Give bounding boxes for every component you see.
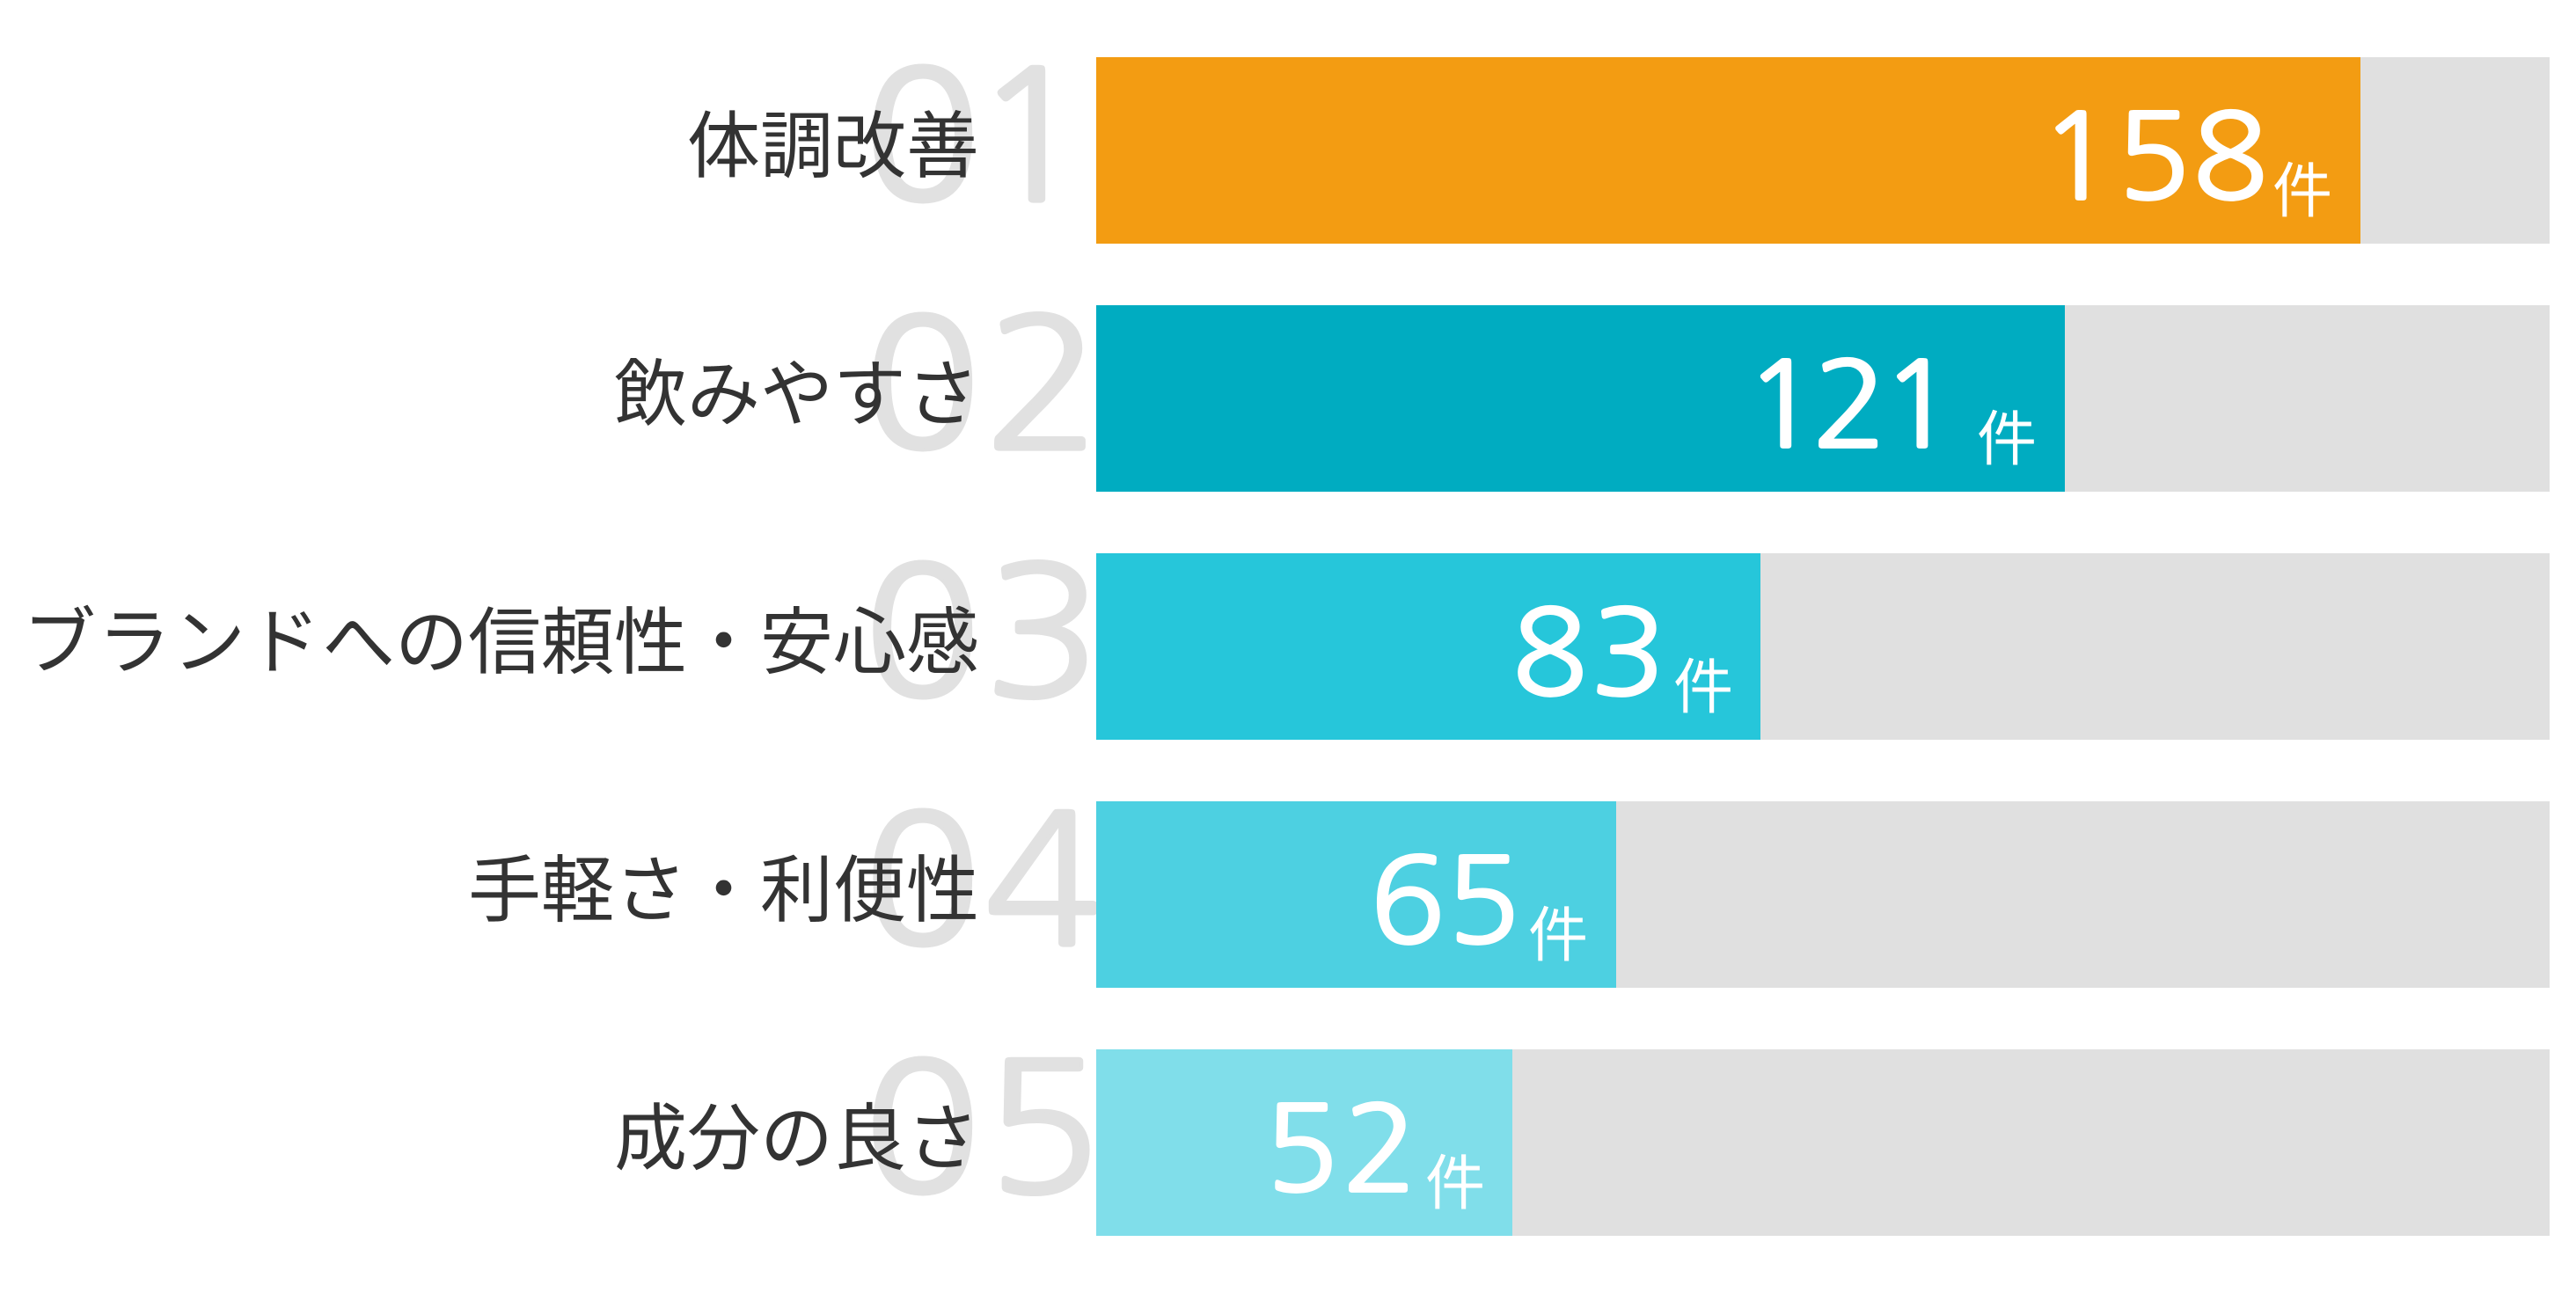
unit: 件 [1977,391,2037,478]
row 4: 手軽さ・利便性 [468,790,2550,988]
track [1096,1049,2550,1236]
row 1: 体調改善 [687,46,2550,244]
rank number 05: 05 [863,1038,1105,1219]
label: 成分の良さ [614,1079,979,1185]
value bar [1096,305,2065,492]
value: 52 [1264,1090,1421,1208]
row 3: ブランドへの信頼性・安心感 [23,542,2550,740]
unit: 件 [1673,639,1733,726]
value bar [1096,1049,1512,1236]
unit: 件 [2272,142,2332,230]
track [1096,57,2550,244]
label: ブランドへの信頼性・安心感 [23,583,979,689]
rank number 04: 04 [863,790,1105,971]
track [1096,305,2550,492]
unit: 件 [1425,1135,1485,1222]
label: 体調改善 [687,87,979,193]
rank number 02: 02 [863,294,1105,475]
track [1096,553,2550,740]
rank number 01: 01 [863,46,1080,227]
unit: 件 [1528,887,1588,974]
row 2: 飲みやすさ [614,294,2550,492]
row 5: 成分の良さ [614,1038,2550,1236]
rank number 03: 03 [863,542,1105,723]
value: 121 [1744,346,1949,464]
track [1096,801,2550,988]
label: 手軽さ・利便性 [468,831,979,937]
value bar [1096,801,1616,988]
value: 158 [2039,98,2269,216]
label: 飲みやすさ [614,335,979,441]
value: 83 [1512,594,1669,712]
value bar [1096,57,2360,244]
value: 65 [1370,842,1521,960]
value bar [1096,553,1760,740]
